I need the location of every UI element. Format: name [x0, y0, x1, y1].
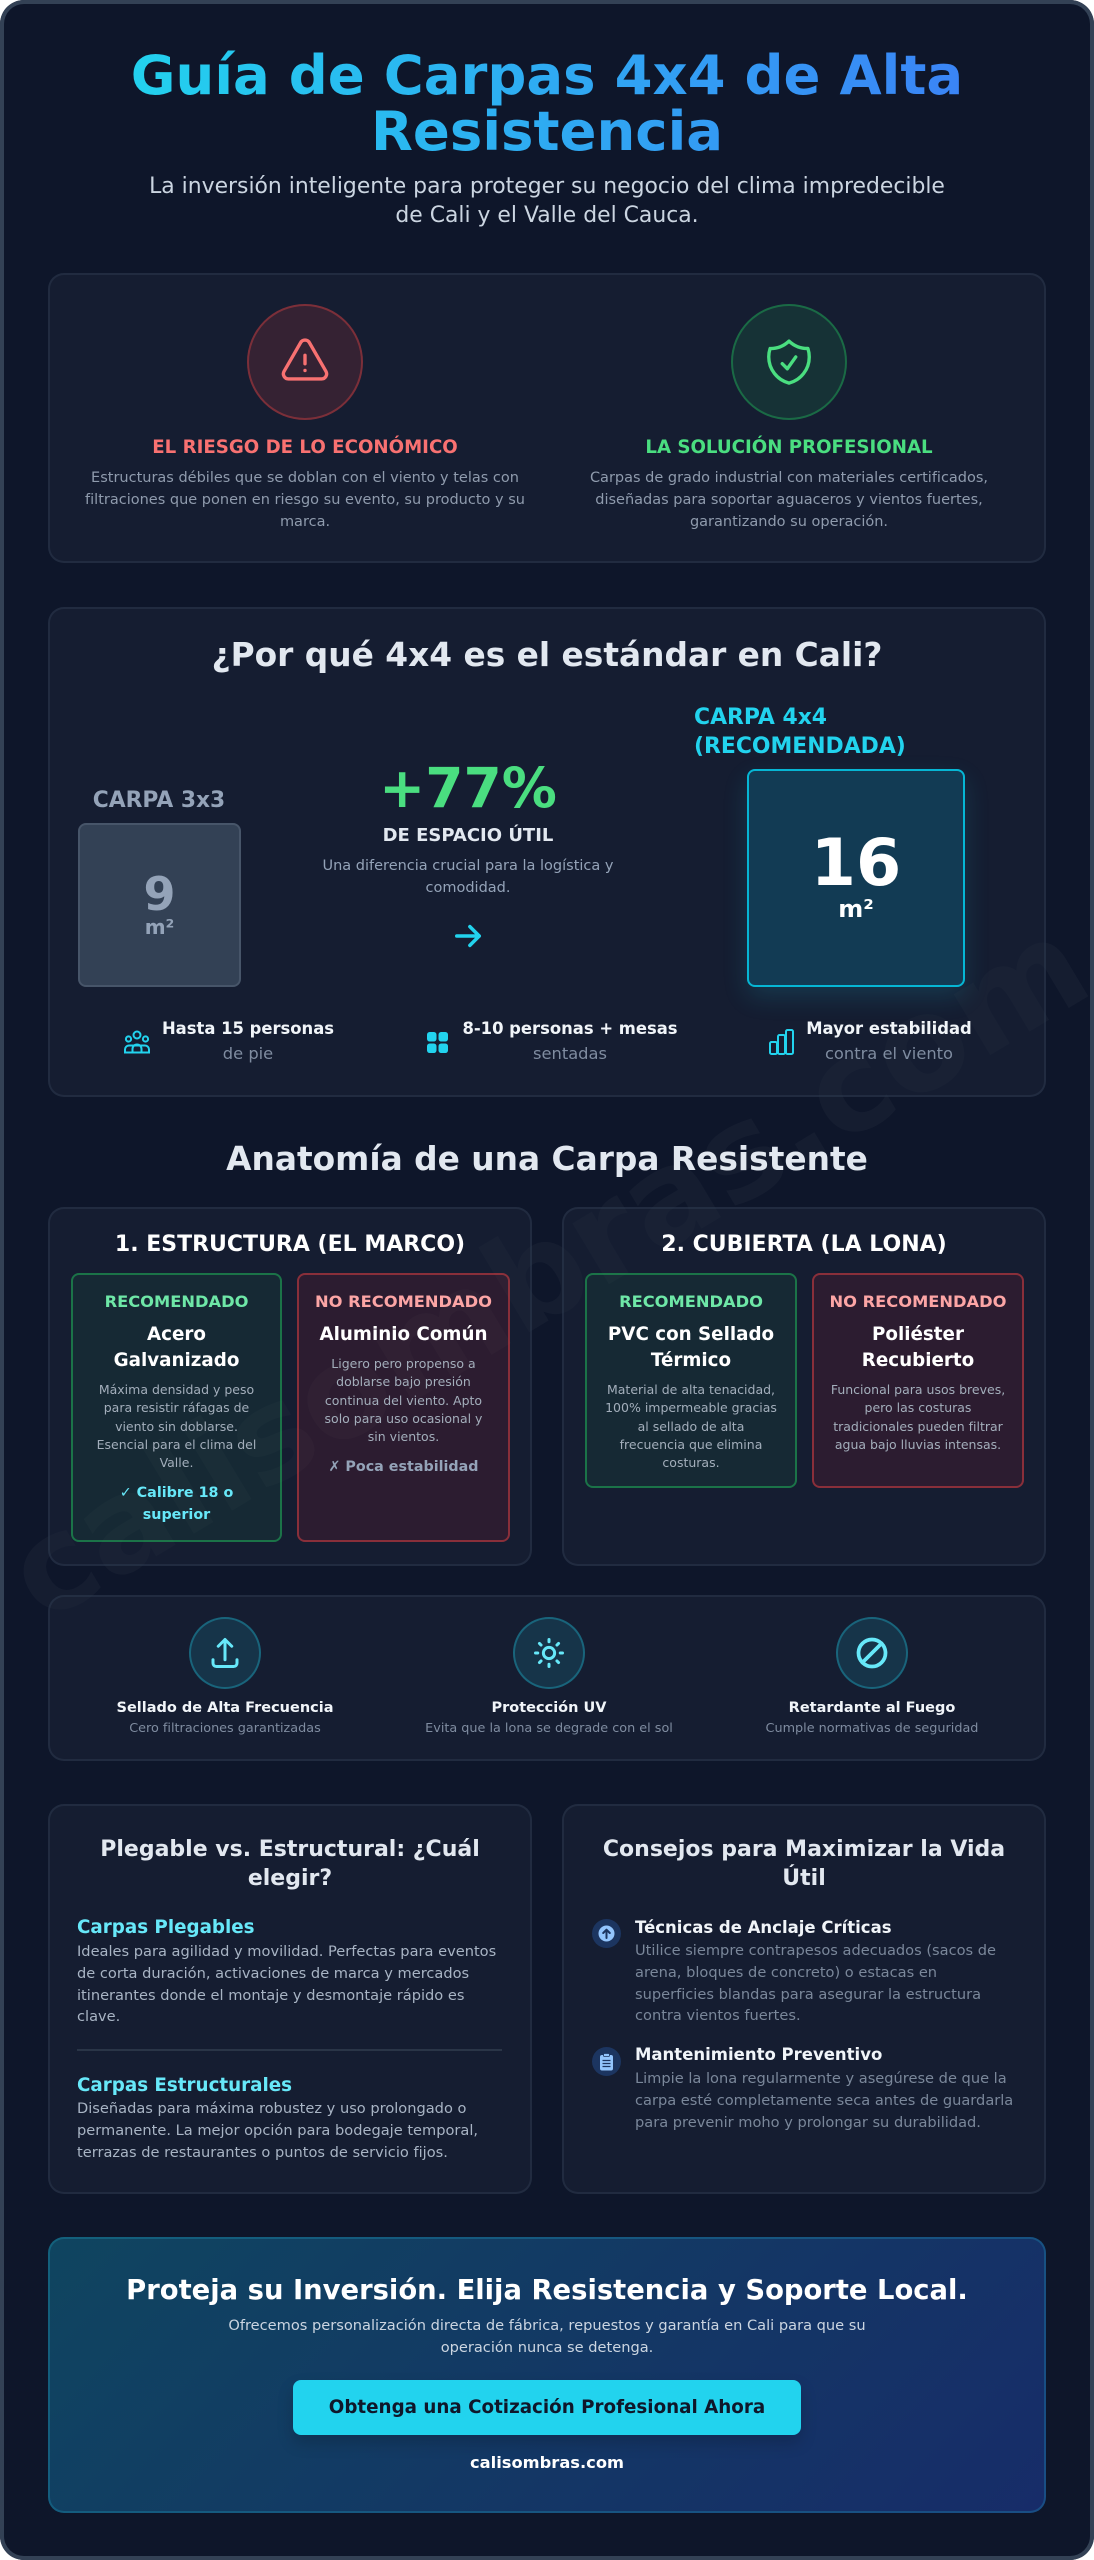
stat description: Una diferencia crucial para la logística y: [322, 858, 613, 874]
heading: solution: LA SOLUCIÓN PROFESIONAL: [645, 437, 933, 458]
spec: ✗ Poca estabilidad: [328, 1459, 479, 1475]
icon: ban: [836, 1617, 908, 1689]
box: 16 m2: [747, 769, 965, 987]
text: Cero filtraciones garantizadas: [129, 1721, 321, 1736]
feature: sealing: [116, 1617, 334, 1736]
stat description: comodidad.: [426, 880, 510, 896]
text: Mayor estabilidad: [806, 1019, 972, 1038]
box: 9 m2: [78, 823, 241, 987]
sub text: sentadas: [533, 1044, 607, 1063]
capacity: stability: [769, 1019, 972, 1063]
panel: tips: [562, 1804, 1046, 2194]
icon: grid: [427, 1032, 448, 1053]
subheading: structural: Carpas Estructurales: [77, 2075, 292, 2096]
name: [114, 1324, 239, 1370]
text: carpa esté completamente seca antes de guardarla: [635, 2092, 1013, 2109]
text: risk description: [85, 470, 525, 530]
name: Recubierto: [862, 1350, 974, 1370]
capacity: people: [124, 1019, 334, 1063]
spec: [120, 1485, 233, 1523]
text: contra vientos fuertes.: [635, 2007, 801, 2024]
description: [325, 1356, 482, 1444]
text: structural: [77, 2100, 478, 2161]
text: Ofrecemos personalización directa de fábrica, repuestos y garantía en Cali para que su: [228, 2317, 866, 2334]
subtitle: de Cali y el Valle del Cauca.: [395, 202, 699, 228]
card: steel: [71, 1273, 282, 1542]
icon: upload: [189, 1617, 261, 1689]
icon: warning triangle: [247, 304, 363, 420]
panel heading: 1. ESTRUCTURA (EL MARCO): [115, 1232, 465, 1256]
text: foldable: de corta duración, activaciones de marca y mercados: [77, 1965, 469, 1982]
text: Utilice siempre contrapesos adecuados (sacos de: [635, 1942, 996, 1959]
text: foldable: Ideales para agilidad y movilidad. Perfectas para eventos: [77, 1943, 496, 1960]
text: solution description: Carpas de grado industrial con materiales certificados,: [590, 470, 988, 486]
button: [293, 2380, 801, 2435]
description: al sellado de alta: [638, 1418, 744, 1434]
text: risk description: Estructuras débiles que se doblan con el viento y telas con: [91, 470, 519, 486]
icon: shield check: [731, 304, 847, 420]
panel: call to action: [48, 2237, 1046, 2513]
label: carpa 3x3: CARPA 3x3: [93, 788, 225, 813]
stat description: [322, 858, 613, 896]
description: viento sin doblarse.: [115, 1418, 238, 1434]
button: Obtenga una Cotización Profesional Ahora: [329, 2397, 765, 2418]
tag: NO RECOMENDADO: [315, 1292, 492, 1311]
text: solution description: garantizando su operación.: [690, 514, 888, 530]
description: [97, 1382, 256, 1470]
feature: UV: [425, 1617, 673, 1736]
heading: anatomy: Anatomía de una Carpa Resistente: [226, 1140, 868, 1178]
panel: features: [48, 1595, 1046, 1761]
text: structural: permanente. La mejor opción para bodegaje temporal,: [77, 2122, 478, 2139]
label: carpa 4x4: (RECOMENDADA): [694, 734, 906, 759]
icon: bars: [769, 1029, 794, 1055]
text: para prevenir moho y prolongar su durabilidad.: [635, 2114, 981, 2131]
description: Material de alta tenacidad,: [607, 1382, 775, 1397]
description: solo para uso ocasional y: [325, 1411, 482, 1426]
description: Ligero pero propenso a: [331, 1356, 476, 1371]
name: Poliéster: [872, 1324, 964, 1345]
description: sin vientos.: [368, 1429, 439, 1444]
spec: superior: [143, 1507, 210, 1523]
capacity: tables: [427, 1019, 678, 1063]
text: foldable: itinerantes donde el montaje y desmontaje rápido es: [77, 1987, 464, 2004]
description: doblarse bajo presión: [336, 1374, 471, 1389]
text: structural: terrazas de restaurantes o puntos de servicio fijos.: [77, 2144, 448, 2161]
text: foldable: clave.: [77, 2008, 120, 2025]
website: calisombras.com: [470, 2453, 624, 2472]
text: structural: Diseñadas para máxima robustez y uso prolongado o: [77, 2100, 466, 2117]
stat label: DE ESPACIO ÚTIL: [383, 825, 553, 846]
title: Protección UV: [492, 1700, 606, 1716]
description: 100% impermeable gracias: [605, 1400, 777, 1415]
heading: Proteja su Inversión. Elija Resistencia y Soporte Local.: [126, 2275, 968, 2306]
text: 8-10 personas + mesas: [462, 1019, 678, 1038]
sub text: de pie: [223, 1044, 273, 1063]
description: costuras.: [662, 1455, 720, 1470]
text: solution description: [590, 470, 988, 530]
icon: clipboard: [592, 2047, 621, 2076]
name: Galvanizado: [114, 1350, 239, 1370]
title: Retardante al Fuego: [789, 1700, 955, 1716]
description: agua bajo lluvias intensas.: [835, 1437, 1001, 1452]
card: aluminium: [297, 1273, 510, 1542]
name: [608, 1324, 774, 1370]
text: solution description: diseñadas para soportar aguaceros y vientos fuertes,: [595, 492, 983, 508]
panel: why 4x4: [48, 607, 1046, 1097]
description: [831, 1382, 1005, 1452]
text: [635, 2070, 1013, 2131]
text: risk description: filtraciones que ponen en riesgo su evento, su producto y su: [85, 492, 525, 508]
heading: Útil: [782, 1866, 826, 1891]
text: [228, 2317, 866, 2356]
heading: elegir?: [248, 1866, 332, 1891]
panel: foldable vs structural: [48, 1804, 532, 2194]
heading: Plegable vs. Estructural: ¿Cuál: [100, 1837, 480, 1862]
text: risk description: marca.: [280, 514, 330, 530]
name: Acero: [147, 1324, 206, 1345]
description: pero las costuras: [865, 1400, 971, 1415]
text: Evita que la lona se degrade con el sol: [425, 1721, 673, 1736]
description: Máxima densidad y peso: [99, 1382, 254, 1397]
card: polyester: [812, 1273, 1024, 1488]
title: Mantenimiento Preventivo: [635, 2045, 882, 2064]
panel heading: 2. CUBIERTA (LA LONA): [661, 1232, 947, 1256]
text: [635, 1942, 996, 2024]
subtitle: La inversión inteligente para proteger su negocio del clima impredecible: [149, 174, 945, 198]
icon: arrow up: [592, 1919, 621, 1948]
tag: RECOMENDADO: [619, 1292, 763, 1311]
tip: anchoring: [592, 1918, 996, 2024]
panel: structure: [48, 1207, 532, 1566]
stat: +77%: +77%: [379, 756, 557, 820]
arrow: [455, 924, 482, 948]
title: Guía de Carpas 4x4 de Alta: [131, 43, 963, 107]
panel: risk vs solution: [48, 273, 1046, 563]
number 16: 16: [811, 826, 901, 901]
description: Esencial para el clima del: [97, 1437, 256, 1452]
description: para resistir ráfagas de: [104, 1400, 249, 1415]
sub text: contra el viento: [825, 1044, 953, 1063]
unit: m²: [145, 915, 174, 939]
icon: people: [124, 1030, 150, 1054]
heading: risk: EL RIESGO DE LO ECONÓMICO: [152, 437, 458, 458]
text: foldable: [77, 1943, 496, 2025]
tag: RECOMENDADO: [105, 1292, 248, 1311]
description: continua del viento. Apto: [325, 1392, 482, 1408]
description: tradicionales pueden filtrar: [833, 1418, 1003, 1434]
description: frecuencia que elimina: [620, 1437, 762, 1452]
unit: m²: [838, 895, 874, 923]
subheading: foldable: Carpas Plegables: [77, 1917, 255, 1938]
subtitle: [149, 174, 945, 228]
feature: fire: [766, 1617, 978, 1736]
title: Sellado de Alta Frecuencia: [116, 1700, 334, 1716]
text: operación nunca se detenga.: [441, 2339, 653, 2356]
label: carpa 4x4: CARPA 4x4: [694, 705, 827, 730]
tag: NO RECOMENDADO: [829, 1292, 1006, 1311]
label: carpa 4x4: [694, 705, 906, 759]
description: Funcional para usos breves,: [831, 1382, 1005, 1397]
icon: sun: [513, 1617, 585, 1689]
card: PVC: [585, 1273, 797, 1488]
heading: [100, 1837, 480, 1891]
number 9: 9: [143, 867, 176, 921]
heading: Consejos para Maximizar la Vida: [603, 1837, 1005, 1862]
text: superficies blandas para asegurar la estructura: [635, 1986, 981, 2003]
panel: cover: [562, 1207, 1046, 1566]
spec: ✓ Calibre 18 o: [120, 1485, 233, 1501]
name: [862, 1324, 974, 1370]
heading: [603, 1837, 1005, 1891]
name: Térmico: [651, 1350, 731, 1370]
name: PVC con Sellado: [608, 1324, 774, 1345]
text: arena, bloques de concreto) o estacas en: [635, 1964, 937, 1981]
text: Limpie la lona regularmente y asegúrese de que la: [635, 2070, 1007, 2087]
description: Valle.: [160, 1455, 193, 1470]
tip: maintenance: [592, 2045, 1013, 2131]
name: Aluminio Común: [319, 1324, 488, 1345]
text: Hasta 15 personas: [162, 1019, 334, 1038]
title: Técnicas de Anclaje Críticas: [635, 1918, 892, 1937]
heading: ¿Por qué 4x4 es el estándar en Cali?: [212, 636, 882, 674]
title: Resistencia: [371, 99, 723, 163]
description: [605, 1382, 777, 1470]
text: Cumple normativas de seguridad: [766, 1721, 978, 1736]
title: [110, 47, 984, 159]
